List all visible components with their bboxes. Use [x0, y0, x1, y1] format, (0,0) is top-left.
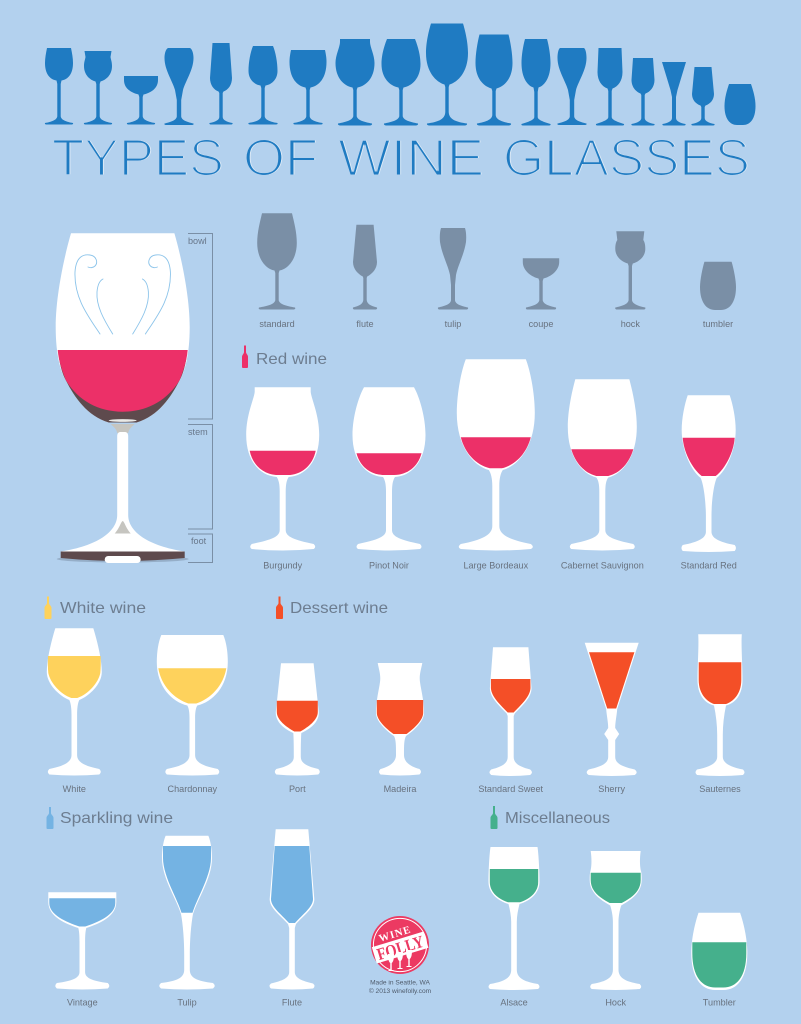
heading: red wine: Red wine — [256, 351, 327, 368]
panel: miscellaneous — [488, 806, 747, 1008]
logo: Wine Folly badge: WINE — [378, 924, 413, 945]
key: standard: standard — [259, 319, 295, 329]
foot base — [61, 552, 185, 561]
logo: Wine Folly badge: FOLLY — [375, 932, 426, 964]
credit text — [369, 980, 432, 995]
glass: Chardonnay: Chardonnay — [168, 784, 218, 794]
key: hock: hock — [621, 319, 640, 329]
key: standard — [257, 213, 297, 329]
glass: White — [47, 628, 102, 794]
large glass bowl — [56, 233, 190, 422]
heading: sparkling wine — [46, 807, 173, 829]
glass: Tumbler: Tumbler — [703, 998, 736, 1008]
title: OF — [243, 130, 318, 188]
glass: Sauternes — [696, 634, 744, 794]
glass: Burgundy — [246, 387, 319, 570]
key: coupe: coupe — [529, 319, 553, 329]
glass: Cabernet Sauvignon: Cabernet Sauvignon — [561, 560, 644, 570]
logo: Wine Folly badge — [371, 916, 429, 974]
title: WINE — [338, 130, 484, 188]
glass: Sherry: Sherry — [598, 784, 626, 794]
glass: Tulip — [159, 836, 215, 1008]
glass: White: White — [63, 784, 86, 794]
glass: Large Bordeaux: Large Bordeaux — [463, 560, 529, 570]
key: coupe — [523, 258, 559, 329]
title: TYPES — [52, 130, 224, 188]
glass shadow — [59, 355, 187, 422]
panel: sparkling wine — [46, 807, 314, 1008]
swirl highlights — [75, 255, 170, 334]
panel: dessert wine — [275, 596, 744, 794]
title — [52, 130, 750, 188]
panel: white wine — [44, 596, 228, 794]
key: tumbler — [700, 262, 736, 329]
glass: Burgundy: Burgundy — [263, 560, 303, 570]
glass: Standard Red: Standard Red — [681, 560, 737, 570]
heading: dessert wine: Dessert wine — [290, 600, 388, 617]
title: GLASSES — [503, 130, 750, 188]
credit text: © 2013 winefolly.com — [369, 987, 432, 995]
foot shadow — [57, 556, 189, 562]
glass: Tulip: Tulip — [177, 998, 197, 1008]
key: flute — [353, 225, 377, 329]
bracket: bowl: bowl — [188, 236, 207, 246]
glass: Pinot Noir: Pinot Noir — [369, 560, 409, 570]
heading: white wine — [44, 596, 146, 619]
key: tulip — [438, 228, 468, 329]
glass: Sherry — [585, 643, 639, 794]
bracket: bowl — [188, 234, 212, 419]
glass: Flute: Flute — [282, 998, 302, 1008]
key: flute: flute — [356, 319, 374, 329]
glass: Standard Sweet: Standard Sweet — [478, 784, 544, 794]
bracket: stem — [188, 424, 212, 529]
panel: anatomy of a wine glass — [56, 233, 212, 563]
bracket: foot — [188, 534, 212, 562]
glass: Vintage — [48, 892, 116, 1008]
glass: Port — [275, 663, 320, 794]
glass: Hock: Hock — [605, 998, 627, 1008]
key: tulip: tulip — [445, 319, 461, 329]
key: hock — [615, 231, 645, 329]
heading: sparkling wine: Sparkling wine — [60, 810, 173, 827]
glass: Alsace: Alsace — [500, 998, 528, 1008]
glass: Tumbler — [691, 913, 747, 1008]
foot highlight — [105, 556, 141, 563]
glass: Madeira — [376, 663, 424, 794]
bracket: stem: stem — [188, 427, 208, 437]
heading: miscellaneous — [490, 806, 610, 829]
glass: Cabernet Sauvignon — [561, 379, 644, 570]
glass: Large Bordeaux — [457, 359, 535, 570]
heading: red wine — [242, 346, 327, 368]
glass: Standard Sweet — [478, 647, 544, 794]
heading: dessert wine — [276, 596, 388, 619]
glass rim highlight — [109, 419, 137, 422]
key: tumbler: tumbler — [703, 319, 733, 329]
glass: Standard Red — [681, 395, 737, 570]
glass: Port: Port — [289, 784, 306, 794]
large glass wine — [58, 350, 188, 412]
heading: white wine: White wine — [60, 600, 146, 617]
panel: red wine — [242, 346, 737, 570]
bracket: foot: foot — [191, 536, 207, 546]
header: row of glass silhouettes — [45, 24, 756, 126]
glass: Vintage: Vintage — [67, 998, 98, 1008]
credit text: Made in Seattle, WA — [370, 980, 431, 986]
stem — [61, 424, 185, 552]
glass: Pinot Noir — [352, 387, 426, 570]
glass: Sauternes: Sauternes — [699, 784, 741, 794]
glass: Chardonnay — [157, 635, 228, 794]
glass: Hock — [590, 851, 642, 1008]
glass: Flute — [270, 829, 314, 1008]
heading: miscellaneous: Miscellaneous — [505, 810, 610, 827]
glass: Alsace — [488, 847, 540, 1008]
glass: Madeira: Madeira — [384, 784, 417, 794]
panel: glass shape key — [257, 213, 736, 329]
